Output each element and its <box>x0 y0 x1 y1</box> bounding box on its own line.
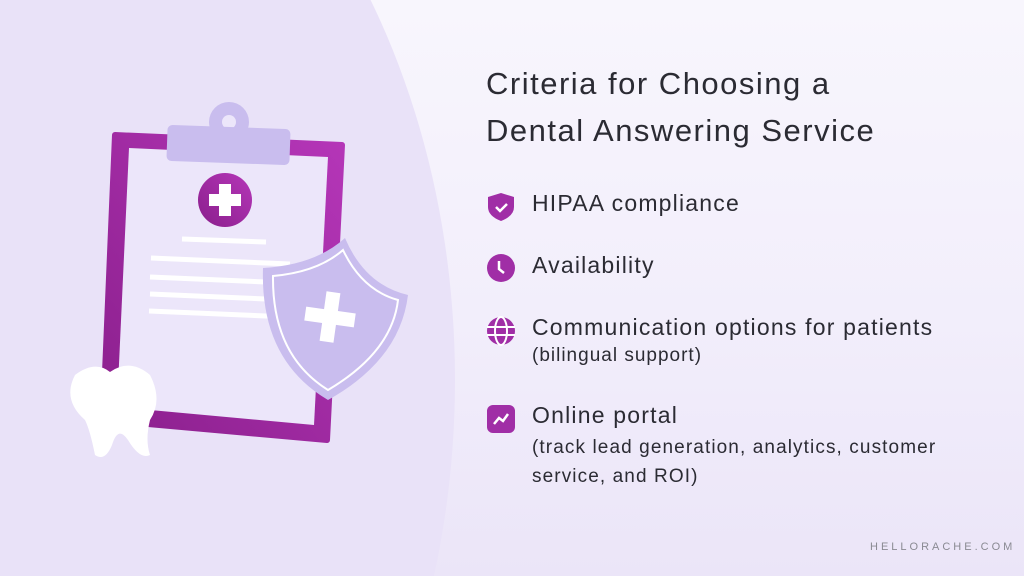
title <box>486 66 875 148</box>
icon: chart <box>487 405 515 433</box>
clipboard board <box>103 102 342 440</box>
item: Online portal: service, and ROI) <box>532 466 699 487</box>
illustration: clipboard with shield and tooth <box>70 102 408 457</box>
title: Criteria for Choosing a <box>486 66 831 101</box>
shield <box>263 238 408 400</box>
footer: website: HELLORACHE.COM <box>870 541 1015 553</box>
tooth <box>70 366 156 457</box>
title: Dental Answering Service <box>486 113 875 148</box>
icon: shield check <box>488 193 514 221</box>
item: Communication: Communication options for patients <box>532 314 933 340</box>
item: Online portal: (track lead generation, analytics, customer <box>532 437 936 458</box>
item: Online portal <box>487 402 936 487</box>
icon: globe <box>487 316 515 346</box>
item: Online portal: Online portal <box>532 402 678 428</box>
item: Communication <box>487 314 933 366</box>
item: HIPAA <box>488 190 740 221</box>
item: Availability: Availability <box>532 252 655 278</box>
item: HIPAA: HIPAA compliance <box>532 190 740 216</box>
item: Availability <box>487 252 655 282</box>
item: Communication: (bilingual support) <box>532 345 702 366</box>
icon: clock <box>487 254 515 282</box>
